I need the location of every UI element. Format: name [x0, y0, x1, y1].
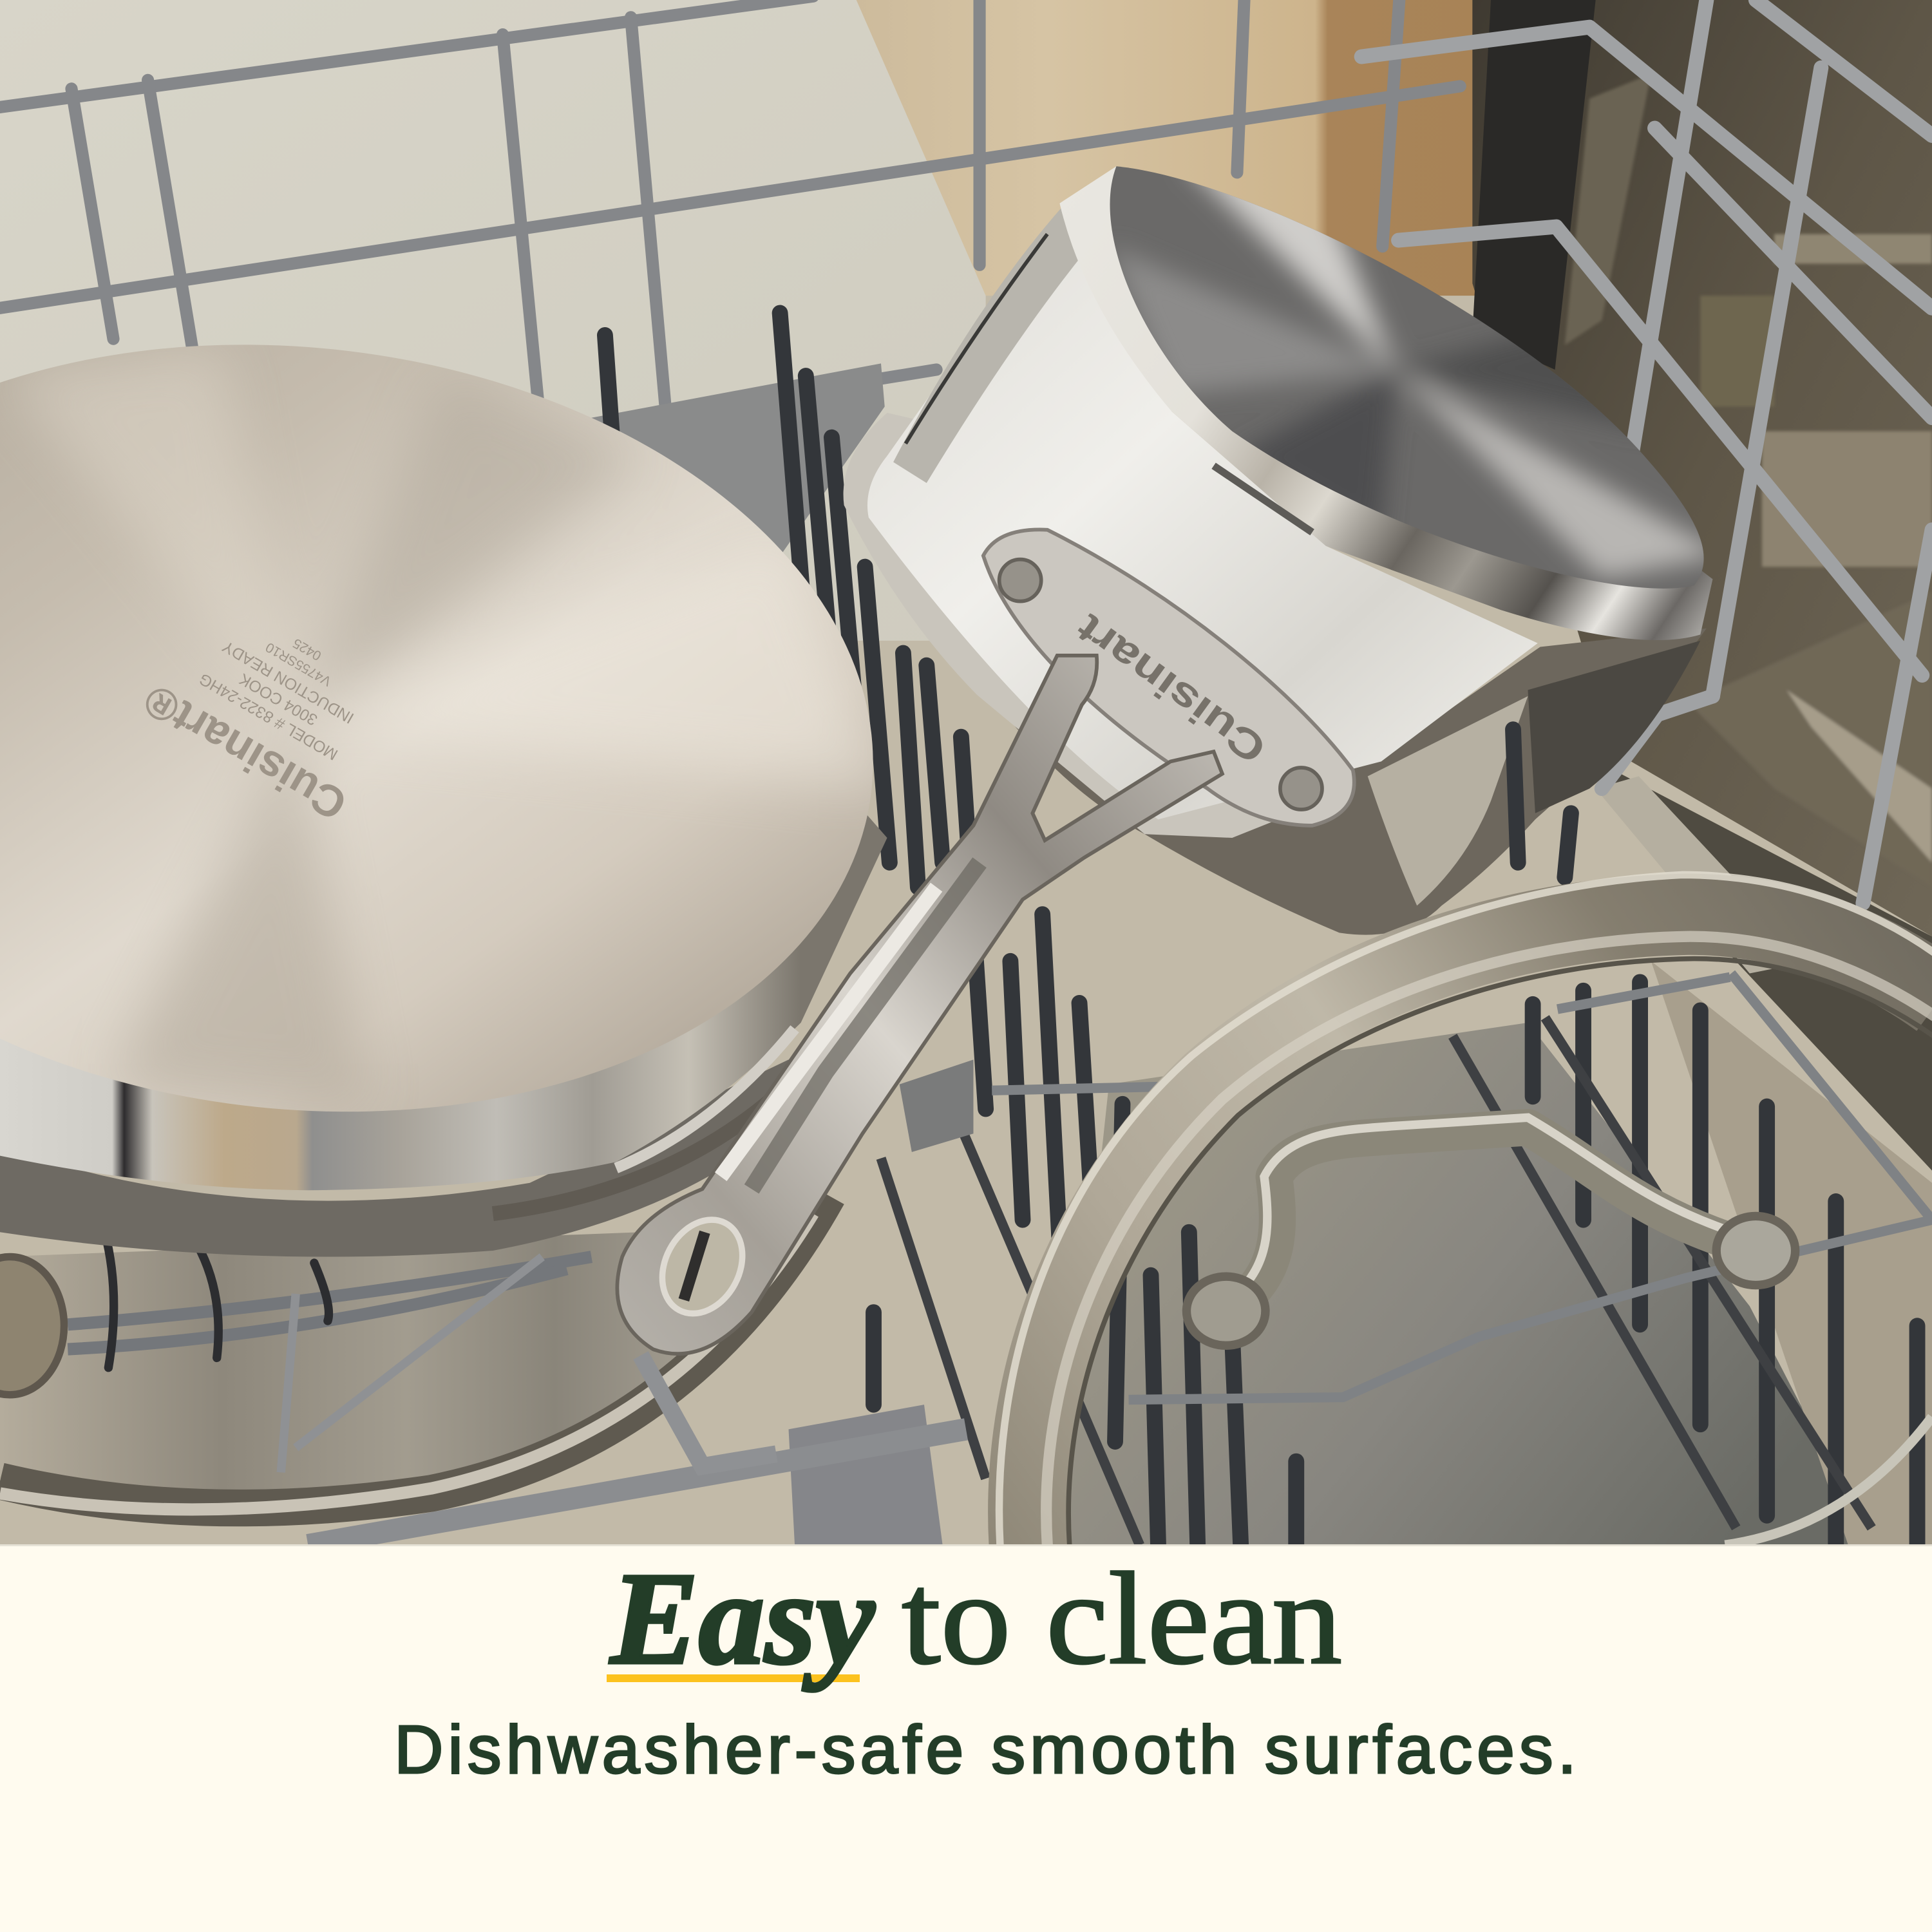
- grey rack clip: [585, 363, 885, 579]
- light tub lip: [1602, 777, 1772, 974]
- embossed pan text: INDUCTION READY: [219, 637, 357, 727]
- pan handle rivet: [0, 1257, 64, 1395]
- lower right dark chrome: [1528, 641, 1700, 813]
- lid rim body: [1028, 914, 1932, 1553]
- lid left knob: [1186, 1276, 1265, 1345]
- embossed pan text: Cuisinart®: [135, 675, 355, 830]
- tub dark side edge: [1602, 764, 1932, 1171]
- saucepan body: [867, 209, 1538, 819]
- lower pan below rack: [0, 1195, 828, 1510]
- brushed sheen: [0, 345, 887, 1109]
- pan rim dark strip: [493, 1066, 807, 1214]
- lower chrome highlights: [1368, 696, 1528, 905]
- rivet bottom: [1280, 768, 1322, 810]
- base sheen: [1109, 148, 1725, 579]
- side wire rack: [1361, 0, 1932, 903]
- long saucepan handle: [617, 656, 1222, 1354]
- handle dark reflection: [752, 862, 980, 1189]
- dishwasher door interior: [1472, 0, 1932, 936]
- lid lower right rim: [1725, 1417, 1932, 1545]
- door reflections: [1565, 74, 1932, 887]
- yellow underline: [607, 1674, 860, 1682]
- handle plate brand: Cuisinart: [1068, 605, 1274, 772]
- large frying pan: [0, 289, 911, 1257]
- saucepan base disc: [1110, 166, 1704, 589]
- handle hanging hole: [647, 1206, 758, 1327]
- lid rim highlight: [999, 875, 1932, 1553]
- kitchen floor background: [0, 0, 986, 641]
- dark door seal: [1472, 0, 1596, 370]
- saucepan lower chrome: [986, 629, 1707, 935]
- embossed pan text: 0425: [290, 636, 324, 663]
- lower rack wires: [881, 1018, 1871, 1545]
- lower pan rim: [0, 1195, 828, 1508]
- headline: [607, 1546, 1342, 1692]
- saucepan body rim: [844, 413, 1356, 838]
- handle bright highlight: [721, 887, 936, 1177]
- embossed pan text: 3004 COOK: [236, 670, 321, 729]
- inner tub under lid: [1059, 1023, 1873, 1545]
- black tines over lower pan: [105, 1232, 329, 1368]
- black rack pegs: [605, 313, 1917, 1545]
- pan chrome band: [0, 739, 887, 1190]
- embossed pan text: MODEL # 8322-24HG: [196, 670, 341, 764]
- lid rim inner highlight: [1046, 936, 1932, 1545]
- tub right wall: [1651, 961, 1932, 1545]
- lid handle highlight: [1220, 1117, 1748, 1306]
- front rack pegs over saucepan: [1513, 730, 1571, 877]
- headline emphasis word: Easy: [609, 1546, 875, 1692]
- small saucepan: [844, 148, 1725, 935]
- pan rim outer strip: [616, 1029, 795, 1168]
- collar dark reflection: [1214, 466, 1312, 533]
- saucepan chrome collar: [1059, 166, 1712, 640]
- pan base disc: [0, 289, 911, 1168]
- rivet top: [999, 560, 1041, 601]
- rack wire bundle over lower pan: [68, 1257, 591, 1472]
- strip dark lines: [905, 234, 1047, 444]
- headline remainder: to clean: [902, 1546, 1342, 1692]
- glass lid: [999, 875, 1932, 1553]
- hole dark bar: [684, 1232, 705, 1300]
- lower pan body: [0, 1232, 739, 1497]
- thin divider edge below photo: [0, 1544, 1932, 1546]
- saucepan body reflective strip: [893, 207, 1084, 483]
- wooden cabinet: [857, 0, 1493, 296]
- lower pan rim highlight: [0, 1214, 813, 1510]
- wire mesh reflection band: [0, 1059, 801, 1257]
- upper wire rack: [0, 0, 1460, 444]
- lid handle: [1220, 1128, 1748, 1316]
- embossed pan text: V4755SR10: [263, 639, 334, 688]
- stainless tub base colour: [0, 296, 1932, 1544]
- lid right knob: [1716, 1216, 1795, 1285]
- subheading: Dishwasher-safe smooth surfaces.: [394, 1712, 1577, 1788]
- lid rim dark edge: [1068, 959, 1932, 1545]
- grey rack clip bottom: [308, 1059, 973, 1545]
- saucepan handle plate: [983, 529, 1354, 826]
